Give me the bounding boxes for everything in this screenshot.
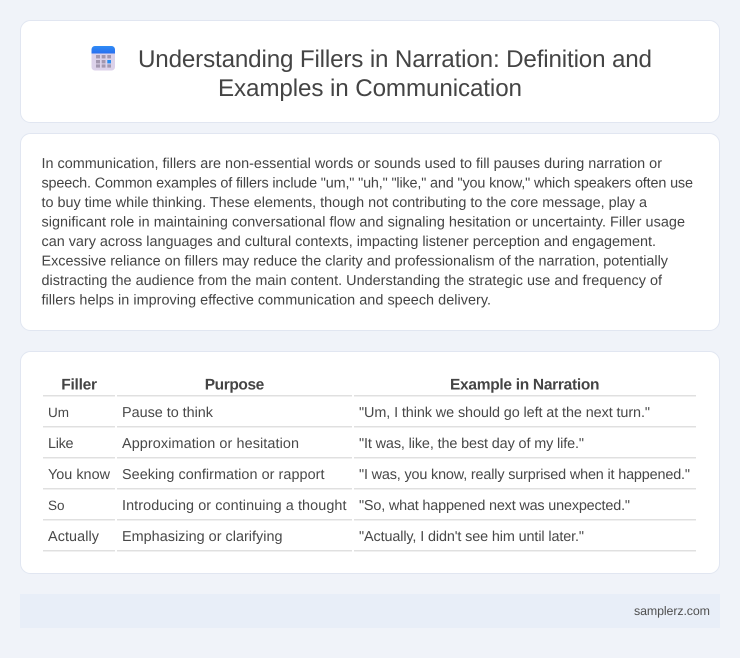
panel: title card — [20, 20, 720, 122]
row: You know: You know — [48, 467, 111, 483]
row: Um: "Um, I think we should go left at the next turn." — [359, 405, 650, 421]
table: fillers — [43, 376, 696, 552]
row: Actually: "Actually, I didn't see him until later." — [359, 529, 584, 545]
text block: description: speech. Common examples of fillers include "um," "uh," "like," and "you know," which speakers often use — [42, 176, 693, 192]
icon: calendar — [92, 46, 115, 70]
text block: description: significant role in maintaining conversational flow and signaling hesitation or uncertainty. Filler usage — [42, 214, 685, 230]
row: Um: Um — [48, 405, 69, 420]
text block: description — [42, 156, 693, 308]
table header: Purpose — [205, 376, 265, 394]
footer — [20, 594, 720, 628]
row: So — [48, 498, 630, 514]
row: So: So — [48, 498, 65, 513]
row: You know: Seeking confirmation or rapport — [122, 467, 324, 483]
panel: description card — [20, 134, 720, 330]
row: You know — [48, 467, 690, 483]
table header: Filler — [61, 376, 97, 394]
text block: description: Excessive reliance on fillers may reduce the clarity and professionalism of the narration, potentially — [42, 254, 669, 270]
text block: description: fillers helps in improving effective communication and speech delivery. — [42, 292, 491, 308]
row: So: "So, what happened next was unexpected." — [359, 498, 630, 514]
row: Actually — [48, 529, 584, 545]
row: Actually: Actually — [48, 529, 100, 545]
row: So: Introducing or continuing a thought — [122, 498, 346, 514]
row: Um: Pause to think — [122, 405, 214, 421]
row: Like: Like — [48, 436, 74, 452]
table header: Example in Narration — [450, 376, 600, 394]
row: Actually: Emphasizing or clarifying — [122, 529, 282, 545]
title: Understanding Fillers in Narration: Definition and — [138, 46, 652, 73]
row: Um — [48, 405, 650, 421]
footer: samplerz.com — [634, 604, 710, 618]
panel: table card — [20, 352, 720, 574]
title — [138, 46, 652, 102]
text block: description: In communication, fillers are non-essential words or sounds used to fill pauses during narration or — [42, 156, 662, 172]
row: Like: Approximation or hesitation — [122, 436, 299, 452]
text block: description: to buy time while thinking. These elements, though not contributing to the core message, play a — [42, 195, 647, 211]
text block: description: distracting the audience from the main content. Understanding the strategic use and frequency of — [42, 273, 663, 289]
row: Like: "It was, like, the best day of my life." — [359, 436, 584, 452]
row: Like — [48, 436, 584, 452]
row: You know: "I was, you know, really surprised when it happened." — [359, 467, 690, 483]
table header — [61, 376, 600, 394]
title: Examples in Communication — [218, 75, 522, 102]
text block: description: can vary across languages and cultural contexts, impacting listener perception and engagement. — [42, 234, 656, 250]
